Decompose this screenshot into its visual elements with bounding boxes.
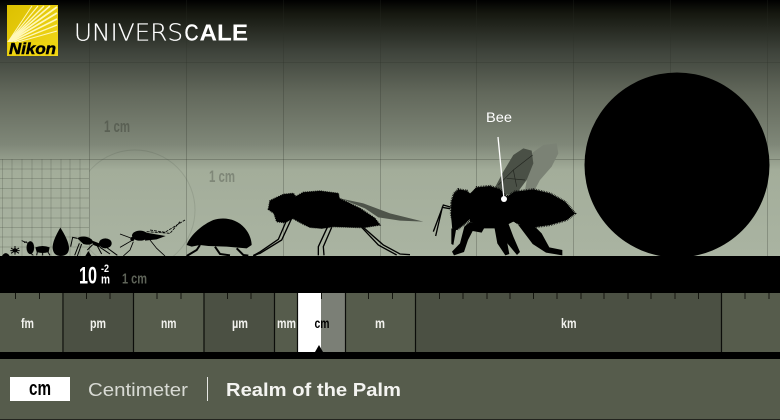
magnitude bar <box>0 256 780 293</box>
arc guide <box>89 150 196 256</box>
magnitude readout: -2 <box>101 263 109 275</box>
title: UNIVERSCALE: C <box>184 20 199 46</box>
unit ruler: µm <box>232 315 248 331</box>
bee pointer <box>498 137 507 202</box>
unit ruler: m <box>375 315 385 331</box>
title: UNIVERSCALE: UNIVERS <box>74 20 183 46</box>
silhouette: bee <box>433 143 575 255</box>
silhouette: tiny specimens <box>2 241 50 256</box>
unit ruler: fm <box>21 315 34 331</box>
segment: km <box>416 293 721 352</box>
unit name: Centimeter <box>88 379 188 400</box>
ruler position marker <box>315 345 323 352</box>
silhouette: sphere <box>584 72 770 258</box>
unit ruler: nm <box>161 315 176 331</box>
title: UNIVERSCALE: ALE <box>200 20 248 46</box>
unit ruler: km <box>561 315 576 331</box>
segment: um <box>204 293 274 352</box>
magnitude readout: 10 <box>79 262 97 290</box>
info panel <box>0 359 780 419</box>
logo: Nikon <box>7 5 58 58</box>
fly wing <box>340 198 423 222</box>
unit ruler <box>0 293 780 352</box>
faint 1 cm label upper: 1 cm <box>104 118 130 136</box>
front bee wing <box>495 148 533 195</box>
title: UNIVERSCALE <box>74 20 248 46</box>
faint 1 cm label lower: 1 cm <box>209 168 235 186</box>
unit badge: cm <box>29 378 51 400</box>
readout: 1 cm: 1 cm <box>122 270 147 288</box>
unit badge <box>10 377 70 401</box>
rear bee wing <box>525 143 558 190</box>
fine centimeter grid <box>0 159 89 256</box>
unit ruler: mm <box>277 315 296 331</box>
scene background <box>0 0 780 258</box>
segment: pm <box>64 293 133 352</box>
silhouette: mosquito <box>120 220 185 256</box>
silhouette: beetle <box>187 218 259 256</box>
unit ruler: pm <box>90 315 106 331</box>
realm name: Realm of the Palm <box>226 379 401 400</box>
magnitude readout: m <box>101 272 110 286</box>
segment: cm selected <box>298 293 345 352</box>
silhouette: seed <box>53 228 69 256</box>
silhouette: ant <box>71 236 117 256</box>
logo: Nikon: Nikon <box>9 41 56 58</box>
unit ruler: cm <box>314 315 330 331</box>
bee label: Bee <box>486 109 512 125</box>
silhouette: fly <box>253 191 423 255</box>
